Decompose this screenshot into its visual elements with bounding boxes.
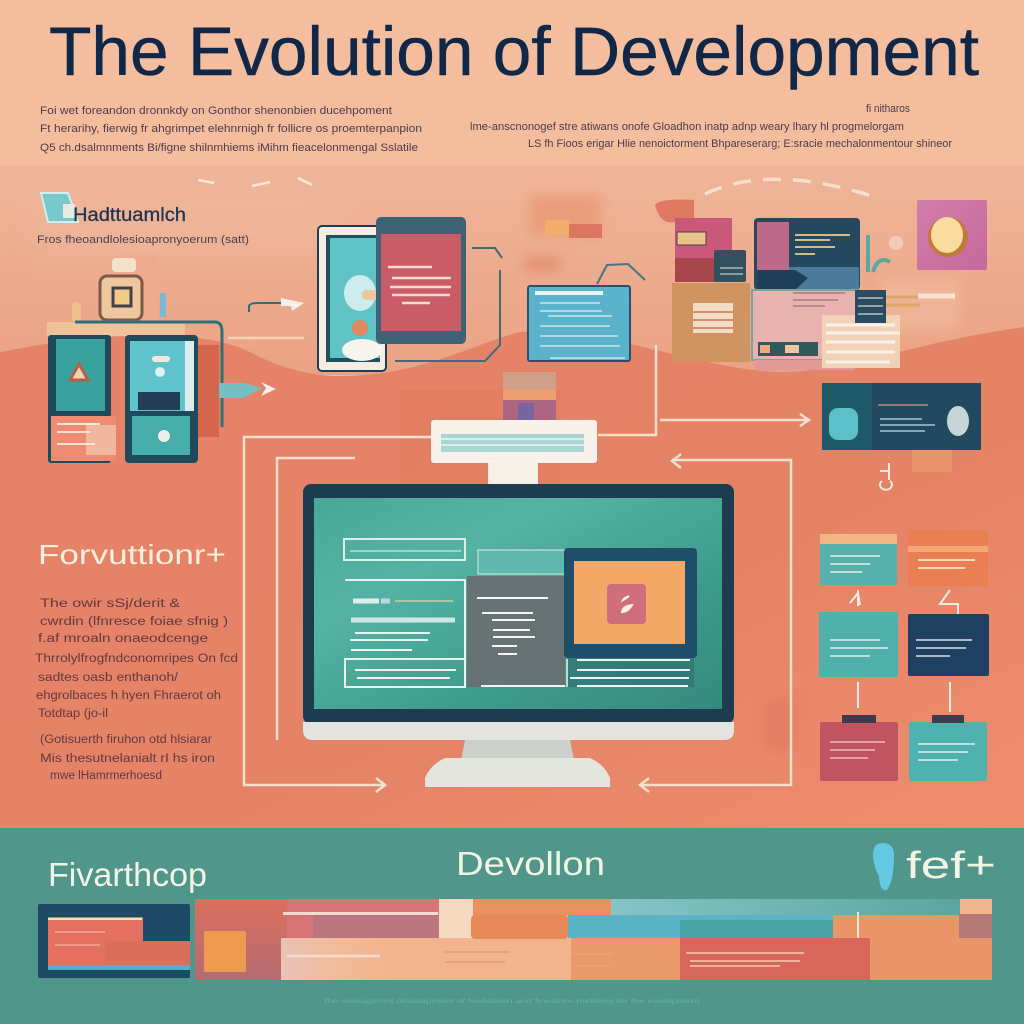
timeline bar [195,899,992,980]
window: code list box [345,580,465,687]
card: red bottom left [820,715,898,781]
arrows: devices to tablet [219,298,304,398]
arrow: card connector bottom left [857,682,859,708]
text block: top left intro: Q5 ch.dsalmnments Bi/figne shilnmhiems iMihm fieacelonmengal Sslatile [40,142,418,154]
text block: top right intro: fi nitharos [866,103,910,115]
connector: chip to devices [75,322,222,427]
shelf and chip [47,255,185,336]
panel: navy preview card [822,383,981,490]
icon: logo badge [41,193,78,222]
device: red side panel [198,345,219,437]
card: teal middle left [819,612,898,677]
window: orange preview [564,548,697,658]
heading: Fivarthcop: Fivarthcop [48,856,207,893]
connector bracket [395,248,502,361]
card: beige notes [822,290,955,368]
text block: left body: (Gotisuerth firuhon otd hlsiarar [40,734,212,746]
monitor frame [303,484,734,724]
text block: left body [35,598,238,782]
decorative smudges [525,195,960,750]
monitor screen [314,498,722,709]
card: tan document [672,283,750,362]
card grid right [819,530,989,781]
text block: left body: sadtes oasb enthanoh/ [38,672,179,684]
window: lower code lines [567,658,694,687]
text block: left body: The owir sSj/derit & [40,598,180,610]
text block: left body: f.af mroaln onaeodcenge [38,633,208,645]
text block: top right intro: lme-anscnonogef stre atiwans onofe Gloadhon inatp adnp weary lhary hl progmelorgam [470,121,904,133]
text block: top left intro: Ft herarihy, fierwig fr ahgrimpet elehnrnigh fr follicre os proemterpanpion [40,123,422,135]
icon: chip [100,276,142,320]
window: top heading box [344,539,465,560]
heading: Forvuthionr: Forvuttionr+ [38,539,226,570]
dashed arc [705,179,875,197]
device: phone right [125,335,198,463]
text block: top right intro: LS fh Fioos erigar Hlie nenoictorment Bhpareserarg; E:sracie mechalonmentour shineor [528,138,952,150]
icon: orange smudge bars [545,220,602,238]
text block: left body: ehgrolbaces h hyen Fhraerot oh [36,690,221,702]
text block: left body: cwrdin (lfnresce foiae sfnig ) [40,616,228,628]
heading: Devollon: Devollon [456,845,605,882]
tablet group [318,217,466,371]
logo label: Hadttuamlch [73,205,186,226]
card: orange top right [908,530,988,586]
card: teal top left [820,534,897,585]
text block: top right intro [470,103,952,150]
card: red folder [675,218,746,282]
arrow: card connector top left [850,590,860,606]
card: teal bottom right [909,715,987,781]
caption: faint footer text: fhe oeleagemnt doselapment of fwvlutioen and finostore mebiling for the evelopment [324,999,700,1005]
document cluster [655,200,987,370]
device: blue window [528,264,645,361]
arrow: card connector bottom right [949,682,951,712]
text block: top left intro [40,105,422,154]
text block: left body: Totdtap (jo-il [38,708,108,720]
text block: left body: mwe lHamrmerhoesd [50,770,162,782]
connector arrows around monitor [244,345,809,792]
card: timeline start [38,904,190,978]
text block: left body: Thrrolylfrogfndconomripes On fcd [35,653,238,665]
decorative flecks [198,178,312,186]
card: navy window [754,218,860,290]
arrow: card connector top right [940,590,958,614]
monitor [303,484,734,787]
icon: stack of layers [503,372,556,420]
device: phone left [48,335,116,463]
icon: pink badge [917,200,987,270]
device: front tablet [376,217,466,344]
text block: left body: Mis thesutnelanialt rI hs iron [40,753,215,765]
icon: blue splash logo [873,843,894,890]
window: gray code panel [467,550,566,687]
label: fef+: fef+ [906,845,996,887]
monitor stand [425,740,610,787]
device: rear tablet [318,226,386,371]
panel: bottom band [0,828,1024,1024]
card: pink document [752,290,857,370]
text block: top left intro: Foi wet foreandon dronnkdy on Gonthor shenonbien ducehpoment [40,105,392,117]
card: navy middle right [908,614,989,676]
title: The Evolution of Development [49,13,979,90]
logo label [37,193,249,246]
server box [431,420,597,484]
logo label: Fros fheoandlolesioapronyoerum (satt) [37,234,249,246]
icon: orange block [204,931,246,972]
